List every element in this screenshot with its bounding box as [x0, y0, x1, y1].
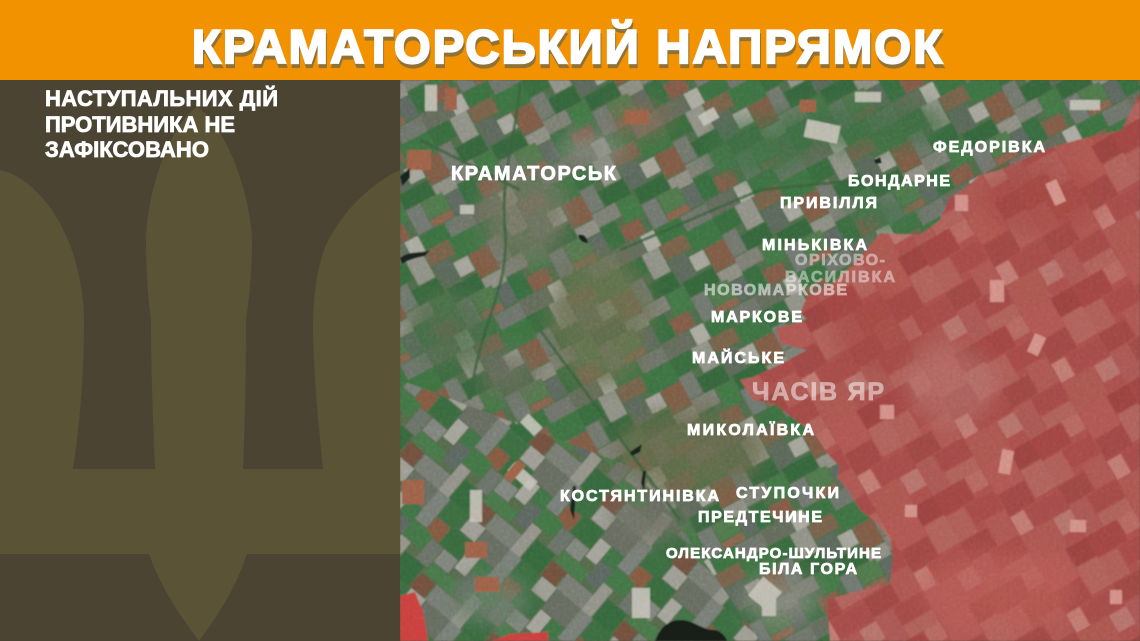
label: Kramatorsk: КРАМАТОРСЬК	[451, 163, 617, 185]
label: Bondarne: БОНДАРНЕ	[848, 173, 950, 190]
title: КРАМАТОРСЬКИЙ НАПРЯМОК	[192, 20, 942, 73]
title bar	[0, 0, 1140, 80]
light occupied fields	[880, 179, 1122, 604]
lake	[655, 620, 727, 641]
red patch: bottom	[492, 632, 548, 641]
central tone	[410, 100, 950, 625]
dark green belts	[420, 82, 860, 520]
label: Stupochky: СТУПОЧКИ	[736, 485, 839, 502]
south-west fields	[400, 380, 760, 641]
label: Orikhovo-Vasylivka	[785, 252, 895, 286]
label: Markove: МАРКОВЕ	[711, 309, 802, 326]
label: Orikhovo-Vasylivka: ОРІХОВО-	[795, 252, 885, 269]
label: Novomarkove: НОВОМАРКОВЕ	[704, 282, 847, 299]
label: Chasiv Yar: ЧАСІВ ЯР	[752, 378, 884, 406]
red patch: bottom left	[400, 592, 428, 641]
map grain	[400, 80, 1140, 641]
text block: status: ЗАФІКСОВАНО	[45, 137, 209, 162]
label: Oleksandro-Shultyne: ОЛЕКСАНДРО-ШУЛЬТИНЕ	[666, 545, 881, 562]
text block: status: НАСТУПАЛЬНИХ ДІЙ	[45, 86, 278, 111]
label: Bila Hora: БІЛА ГОРА	[759, 561, 857, 578]
label: Orikhovo-Vasylivka: ВАСИЛІВКА	[785, 269, 895, 286]
title shadow: КРАМАТОРСЬКИЙ НАПРЯМОК	[193, 24, 943, 77]
label: Predtechyne: ПРЕДТЕЧИНЕ	[698, 509, 822, 526]
reservoirs	[400, 157, 882, 520]
panel: satellite map	[400, 80, 1140, 641]
label: Fedorivka: ФЕДОРІВКА	[933, 139, 1045, 156]
label: Pryvillia: ПРИВІЛЛЯ	[780, 195, 877, 212]
left panel background	[0, 80, 400, 641]
text block: status	[45, 86, 278, 162]
text block: status: ПРОТИВНИКА НЕ	[45, 112, 235, 137]
label: Mykolaivka: МИКОЛАЇВКА	[687, 421, 814, 439]
map fields base	[400, 80, 1140, 641]
light fields	[425, 85, 1100, 618]
label: Maiske: МАЙСЬКЕ	[692, 348, 784, 367]
icon: trident emblem	[0, 107, 400, 641]
brown fields	[402, 88, 816, 592]
label: Minkivka: МІНЬКІВКА	[762, 237, 867, 254]
label: Kostiantynivka: КОСТЯНТИНІВКА	[560, 488, 719, 505]
occupied area	[740, 93, 1140, 641]
